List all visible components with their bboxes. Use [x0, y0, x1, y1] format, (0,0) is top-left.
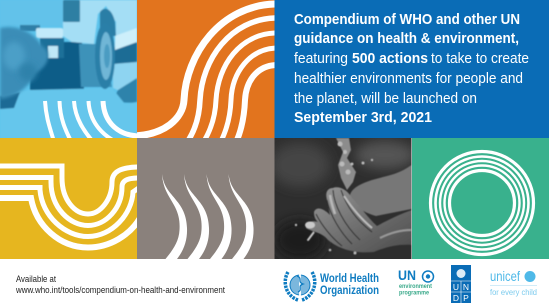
logo: UNDP: D [453, 293, 459, 303]
heading text: guidance on health & environment, [294, 30, 519, 47]
heading text: healthier environments for people and [294, 70, 523, 87]
panel: truck exhaust photo [0, 0, 140, 145]
heading text [294, 11, 529, 126]
footer availability text: Available at [16, 274, 56, 284]
logo: unicef for every child: for every child [490, 287, 537, 297]
logo: UN environment programme: environment [399, 284, 432, 290]
logo: World Health Organization: Organization [320, 285, 379, 297]
panel: hands under water photo [270, 138, 415, 260]
icon: unicef emblem [524, 271, 536, 282]
water stream [295, 138, 373, 254]
panel: grey with wavy lines [137, 138, 274, 259]
logo: UNDP: P [463, 293, 469, 303]
logo: UN environment programme: UN [398, 267, 416, 283]
white curve ends on photo [43, 100, 137, 138]
heading text: 500 actions [352, 50, 428, 67]
panel: green with concentric rings [412, 138, 549, 259]
upper hand [350, 165, 412, 216]
footer availability text: www.who.int/tools/compendium-on-health-and-environment [15, 285, 225, 295]
heading text: the planet, will be launched on [294, 90, 477, 107]
logo: UNDP: U [453, 282, 459, 292]
logo: unicef for every child: unicef [490, 269, 520, 284]
heading text: to take to create [431, 50, 529, 67]
heading text: September 3rd, 2021 [294, 109, 432, 126]
heading text: Compendium of WHO and other UN [294, 11, 520, 28]
heading text: featuring [294, 50, 348, 67]
panel: orange with flowing lines [137, 0, 274, 138]
logo: World Health Organization: World Health [320, 273, 379, 285]
logo: UNDP: N [463, 282, 469, 292]
exhaust smoke [0, 27, 48, 99]
logo: unicef for every child [490, 269, 537, 297]
icon: WHO emblem [285, 270, 315, 300]
panel: blue text block [274, 0, 549, 138]
icon: UN environment emblem [422, 271, 434, 282]
logo: UNDP [451, 265, 471, 303]
panel: yellow with U-shaped lines [0, 138, 140, 259]
logo: World Health Organization [285, 270, 379, 300]
logo: UN environment programme: programme [399, 290, 430, 296]
finger creases [316, 190, 372, 246]
logo: UN environment programme [398, 267, 434, 296]
cupped hand and fingers [306, 187, 412, 252]
footer availability text [15, 274, 225, 295]
